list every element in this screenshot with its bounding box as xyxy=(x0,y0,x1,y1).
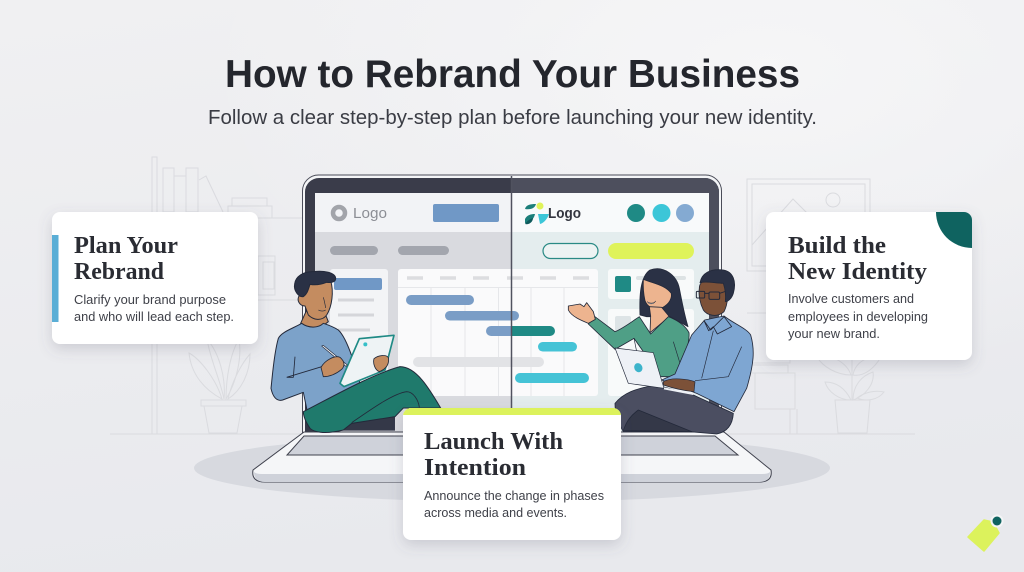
body text: Announce the change in phases xyxy=(424,489,604,503)
left screen: old brand: Logo xyxy=(353,205,387,222)
right screen: new brand: Logo xyxy=(548,205,581,222)
man with laptop xyxy=(615,270,753,434)
person: woman presenting xyxy=(568,269,753,434)
old logo xyxy=(333,207,345,219)
background line art: right frame and plant xyxy=(745,179,884,434)
gantt chart xyxy=(398,269,598,396)
heading: Plan Your xyxy=(74,233,178,259)
laptop base xyxy=(253,432,771,482)
new logo xyxy=(525,202,549,224)
body text: Clarify your brand purpose xyxy=(74,293,226,307)
card: Launch With Intention xyxy=(403,408,621,540)
ground shadow ellipse xyxy=(194,434,830,502)
laptop lid xyxy=(302,175,722,434)
body text: Involve customers and xyxy=(788,292,914,306)
title: How to Rebrand Your Business xyxy=(225,53,800,96)
icon: price tag xyxy=(968,514,1004,551)
heading: Launch With xyxy=(424,429,563,455)
person: man with tablet xyxy=(271,271,441,433)
body text: across media and events. xyxy=(424,506,567,520)
heading: Build the xyxy=(788,233,886,259)
heading: Rebrand xyxy=(74,259,165,285)
body text: employees in developing xyxy=(788,310,928,324)
background line art: left shelves and plant xyxy=(110,157,915,434)
subtitle: Follow a clear step-by-step plan before launching your new identity. xyxy=(208,107,817,129)
laptop xyxy=(253,175,771,482)
body text: and who will lead each step. xyxy=(74,310,234,324)
left screen: old brand xyxy=(315,193,512,433)
heading: New Identity xyxy=(788,259,927,285)
card: Plan Your Rebrand xyxy=(52,212,258,344)
card: Build the New Identity xyxy=(766,212,972,360)
heading: Intention xyxy=(424,455,526,481)
right screen: new brand xyxy=(512,193,709,433)
body text: your new brand. xyxy=(788,327,880,341)
